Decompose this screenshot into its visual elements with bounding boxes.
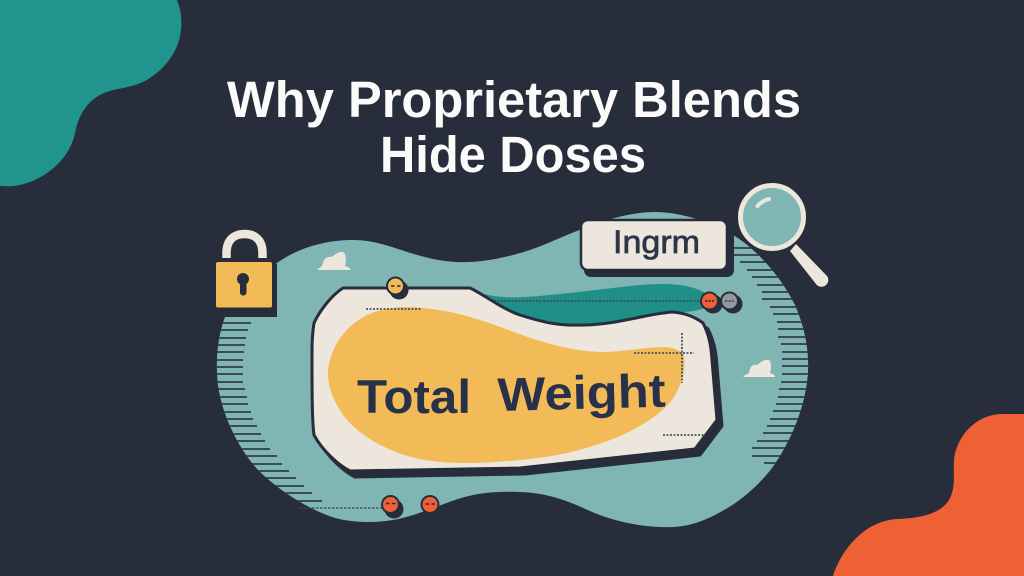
- title: Why Proprietary Blends: [227, 71, 801, 128]
- dotted guides on card: [366, 309, 704, 435]
- card shadow: [317, 294, 722, 477]
- icon: cloud right: [743, 360, 775, 377]
- panel: total weight card: [312, 288, 722, 477]
- title: Hide Doses: [380, 126, 646, 183]
- title: [227, 71, 801, 183]
- card label: total weight: Total: [357, 370, 471, 423]
- central teal blob: [217, 212, 808, 527]
- card label: total weight: Weight: [497, 364, 667, 421]
- hatch lines: left edge: [205, 323, 322, 501]
- marker: orange: [700, 292, 722, 314]
- card label: total weight: [357, 364, 667, 423]
- label box: ingrm: Ingrm: [613, 224, 700, 260]
- icon: padlock: [216, 234, 277, 317]
- corner blob: teal top-left: [0, 0, 181, 186]
- marker: orange bottom left: [381, 495, 404, 518]
- hatch lines: right edge: [734, 247, 808, 464]
- marker: grey: [720, 292, 742, 314]
- marker: orange bottom right: [420, 495, 440, 514]
- yellow blob: [328, 307, 684, 463]
- card outline: [312, 288, 717, 471]
- dotted line: bottom markers: [300, 507, 382, 509]
- marker: yellow: [386, 276, 408, 300]
- dotted line: to orange and grey markers: [480, 300, 705, 302]
- label box: ingrm: [581, 220, 734, 277]
- icon: magnifying glass: [740, 186, 828, 287]
- icon: cloud left: [317, 252, 351, 270]
- dark teal band: [470, 284, 712, 326]
- corner blob: orange bottom-right: [833, 414, 1024, 576]
